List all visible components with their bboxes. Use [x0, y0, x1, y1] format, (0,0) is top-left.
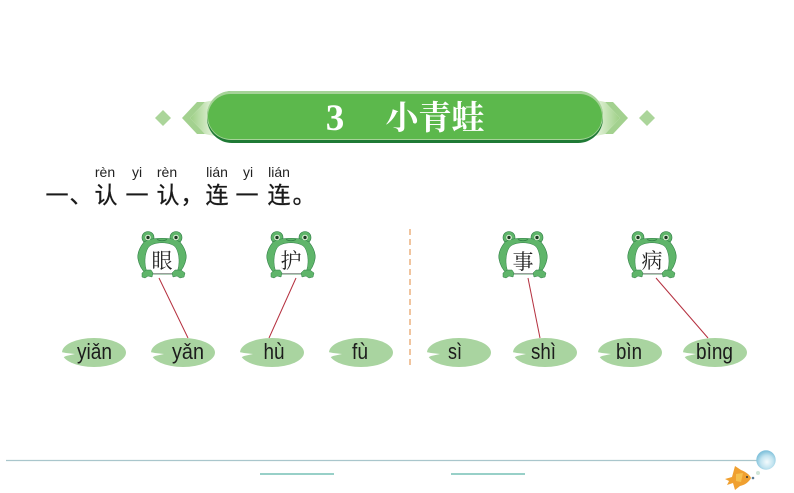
frog: 病: 病 [642, 249, 662, 273]
pinyin line: lián [206, 164, 228, 180]
footer tab right [451, 473, 525, 475]
lily pad: bìng: bìng [696, 339, 733, 364]
icon: left diamond [155, 110, 171, 126]
lily pad: shì [512, 338, 577, 367]
Chinese instruction: 一 [236, 182, 258, 208]
Chinese instruction: 连 [206, 182, 228, 208]
frog: 护: 护 [280, 249, 302, 273]
Chinese instruction: 连 [268, 182, 290, 208]
pinyin line: rèn [95, 164, 115, 180]
lily pad: yiǎn: yiǎn [77, 339, 112, 364]
footer tab left [260, 473, 334, 475]
pinyin line: lián [268, 164, 290, 180]
Chinese instruction: 一 [126, 182, 148, 208]
lily pad: bìn [597, 338, 662, 367]
frog: 护 [267, 232, 315, 278]
icon: left chevrons [182, 100, 214, 136]
title text: 小青蛙 [386, 100, 484, 137]
Chinese instruction [46, 182, 316, 208]
lily pad: yǎn: yǎn [172, 339, 204, 364]
pinyin line: rèn [157, 164, 177, 180]
icon: right diamond [639, 110, 655, 126]
pinyin line: yi [132, 164, 142, 180]
frog: 眼 [138, 232, 186, 278]
lily pad: yiǎn [61, 338, 126, 367]
lily pad: shì: shì [531, 339, 556, 364]
pinyin line: yi [243, 164, 253, 180]
frog: 病 [628, 232, 676, 278]
lily pad: fù [328, 338, 393, 367]
icon: small bubbles [752, 471, 760, 479]
Chinese instruction: 认 [94, 182, 118, 208]
icon: goldfish [725, 466, 751, 490]
instruction heading with pinyin [46, 164, 316, 208]
lily pad: bìng [682, 338, 747, 367]
banner: lesson title [155, 91, 655, 143]
footer line [6, 460, 757, 462]
Chinese instruction: ， [180, 182, 204, 208]
lily pad: fù: fù [352, 339, 368, 364]
frog: 事 [499, 232, 547, 278]
lily pad: sì: sì [448, 339, 462, 364]
connecting answer lines [159, 278, 708, 338]
Chinese instruction: 、 [70, 182, 92, 208]
icon: bubble [756, 450, 776, 470]
frog: 事: 事 [512, 250, 534, 274]
Chinese instruction: 。 [292, 182, 316, 208]
lily pad: hù: hù [264, 339, 284, 364]
banner pill [207, 91, 603, 143]
frog: 眼: 眼 [152, 249, 172, 273]
Chinese instruction: 认 [156, 182, 180, 208]
title number: 3 [326, 98, 344, 139]
lily pad: bìn: bìn [616, 339, 642, 364]
icon: right chevrons [596, 100, 628, 136]
pinyin line [95, 164, 290, 180]
Chinese instruction: 一 [46, 182, 68, 208]
lily pad: hù [239, 338, 304, 367]
lily pad: yǎn [150, 338, 215, 367]
lily pad: sì [426, 338, 491, 367]
